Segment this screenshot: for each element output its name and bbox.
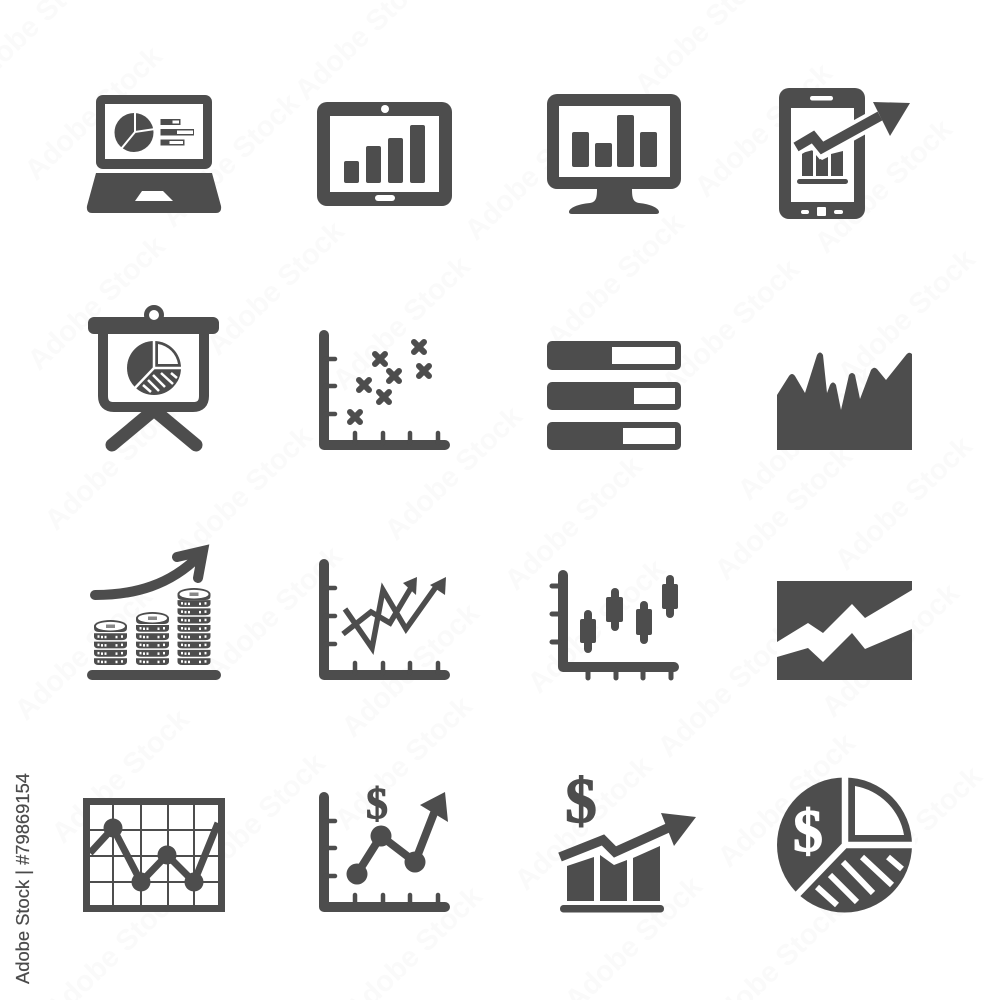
base line bbox=[87, 670, 221, 680]
monitor bars bbox=[572, 115, 657, 167]
hanger ring bbox=[146, 308, 162, 322]
watermark: Adobe Stock bbox=[656, 253, 806, 400]
icon: jagged area chart bbox=[777, 352, 912, 450]
watermark: Adobe Stock bbox=[169, 420, 319, 567]
stock id caption: Adobe Stock | #79869154 bbox=[12, 773, 33, 984]
watermark: Adobe Stock bbox=[522, 553, 672, 700]
icon: candlestick chart bbox=[552, 575, 678, 678]
watermark: Adobe Stock bbox=[9, 580, 159, 727]
pie chart bbox=[114, 111, 155, 152]
candles bbox=[580, 575, 678, 653]
scatter axes bbox=[324, 335, 445, 445]
dollar sign: $ bbox=[793, 798, 823, 864]
line and markers bbox=[346, 792, 448, 884]
line with markers bbox=[90, 818, 218, 892]
icon: laptop with pie chart and bars bbox=[87, 95, 221, 213]
icon: pie chart with dollar sign bbox=[777, 775, 915, 912]
watermark: Adobe Stock bbox=[199, 540, 349, 687]
icon: dollar line chart with arrow bbox=[324, 779, 448, 907]
watermark: Adobe Stock bbox=[732, 360, 882, 507]
watermark: Adobe Stock bbox=[709, 440, 859, 587]
laptop base bbox=[87, 173, 221, 213]
axes bbox=[563, 575, 674, 667]
coin stack medium bbox=[136, 612, 169, 665]
watermark: Adobe Stock bbox=[379, 400, 529, 547]
tablet bars bbox=[344, 125, 425, 183]
watermark: Adobe Stock bbox=[201, 215, 351, 362]
icon: dollar bar chart with arrow bbox=[560, 766, 696, 912]
watermark: Adobe Stock bbox=[509, 750, 659, 897]
icon: three horizontal progress bars bbox=[547, 341, 681, 450]
phone arrow bbox=[796, 102, 910, 148]
icon: double zigzag line chart bbox=[324, 564, 446, 675]
watermark: Adobe Stock bbox=[499, 450, 649, 597]
icon: presentation board with pie chart bbox=[88, 308, 219, 445]
watermark: Adobe Stock bbox=[327, 250, 477, 397]
watermark: Adobe Stock bbox=[839, 760, 989, 907]
icon: grid line chart bbox=[86, 802, 222, 908]
watermark: Adobe Stock bbox=[329, 690, 479, 837]
watermark: Adobe Stock bbox=[809, 113, 959, 260]
zigzag lines bbox=[343, 584, 438, 648]
coin stack tall bbox=[178, 588, 210, 665]
pie chart with hatch bbox=[127, 339, 183, 395]
icon: scatter plot bbox=[324, 335, 445, 445]
watermark: Adobe Stock bbox=[39, 390, 189, 537]
watermark: Adobe Stock bbox=[156, 87, 306, 234]
watermark: Adobe Stock bbox=[652, 617, 802, 764]
outlined slice bbox=[855, 786, 904, 835]
bars bbox=[560, 846, 664, 912]
scatter points bbox=[350, 342, 429, 422]
arrowheads bbox=[403, 577, 446, 595]
watermark: Adobe Stock bbox=[712, 727, 862, 874]
dollar sign: $ bbox=[366, 779, 388, 828]
dollar sign: $ bbox=[565, 766, 597, 836]
watermark: Adobe Stock bbox=[46, 703, 196, 850]
watermark: Adobe Stock bbox=[459, 100, 609, 247]
coin stack small bbox=[94, 620, 127, 665]
watermark: Adobe Stock bbox=[541, 207, 691, 354]
watermark: Adobe Stock bbox=[182, 747, 332, 894]
top bar bbox=[88, 317, 219, 334]
monitor stand bbox=[569, 189, 659, 214]
watermark: Adobe Stock bbox=[22, 230, 172, 377]
watermark: Adobe Stock bbox=[689, 57, 839, 204]
icon: smartphone with rising arrow bbox=[779, 88, 910, 219]
phone bars bbox=[797, 150, 848, 184]
grid bbox=[86, 802, 222, 908]
watermark: Adobe Stock bbox=[336, 597, 486, 744]
growth arrow bbox=[95, 551, 203, 595]
hatched slice bbox=[817, 857, 902, 905]
axes bbox=[324, 564, 445, 675]
watermark: Adobe Stock bbox=[832, 243, 982, 390]
icon: tablet with bar chart bbox=[317, 102, 452, 206]
watermark: Adobe Stock bbox=[19, 40, 169, 187]
axes bbox=[324, 797, 445, 907]
icon: desktop monitor with bar chart bbox=[547, 94, 681, 214]
icon: area chart with white band bbox=[777, 581, 912, 680]
board frame bbox=[103, 325, 204, 407]
easel legs bbox=[112, 410, 196, 445]
laptop screen bbox=[96, 95, 212, 169]
arrow bbox=[560, 813, 696, 857]
watermark: Adobe Stock bbox=[829, 430, 979, 577]
watermark: Adobe Stock bbox=[816, 577, 966, 724]
slice dividers bbox=[795, 775, 915, 897]
progress bars bbox=[160, 119, 194, 146]
icon: coin stacks with growth arrow bbox=[87, 551, 221, 680]
